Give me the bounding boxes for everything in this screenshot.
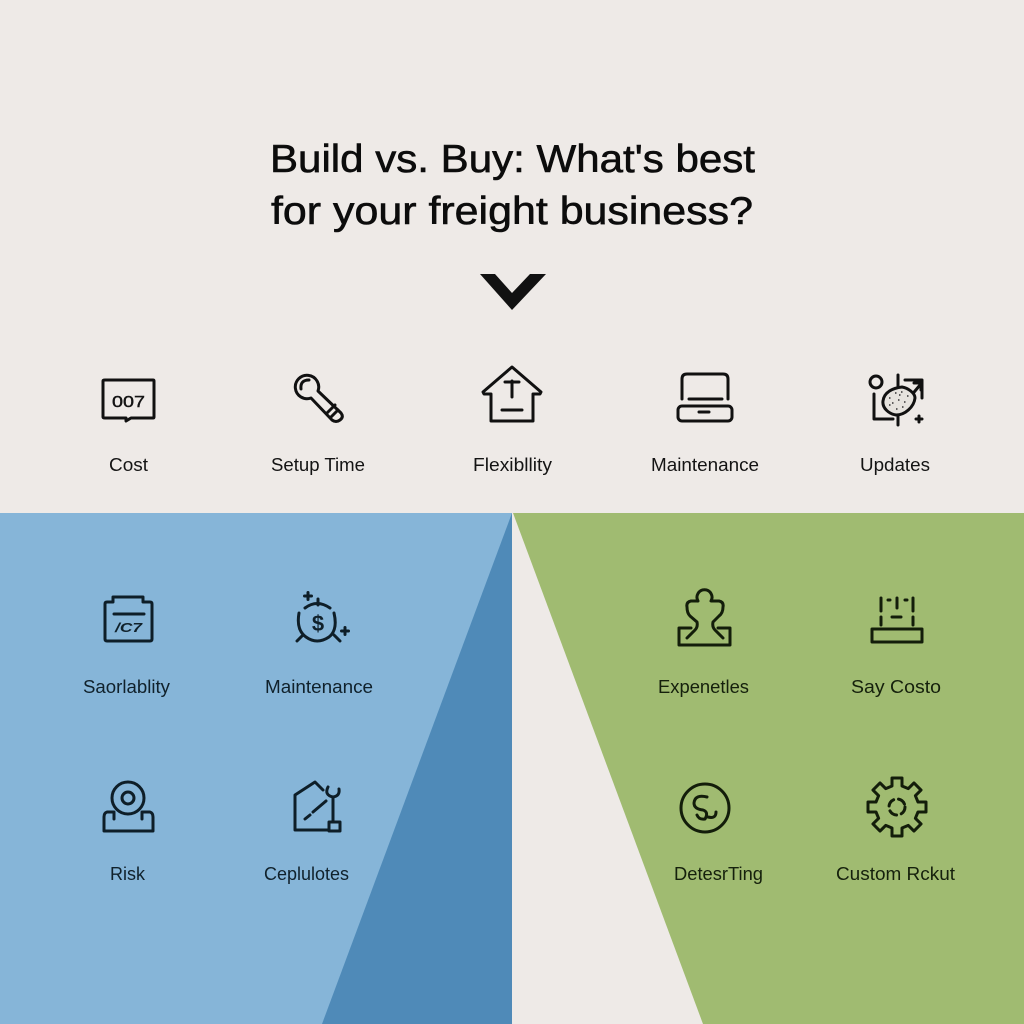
item: Maintenance (651, 374, 759, 475)
icon: wrench (295, 375, 342, 422)
icon: house with wrench (295, 782, 340, 831)
icon: dotted leaf with arrow (870, 375, 922, 425)
item: Ceplulotes (264, 782, 349, 884)
title (270, 138, 755, 233)
icon: laptop (678, 374, 732, 421)
label: Setup Time: Setup Time (271, 455, 365, 475)
item: Expenetles (658, 590, 749, 697)
item: Risk (104, 782, 153, 884)
label: Flexibility: Flexibllity (473, 455, 552, 475)
icon: folder: /C7 (114, 621, 143, 635)
title: for your freight business? (271, 190, 753, 233)
item: Detesrting (674, 784, 763, 884)
icon: pedestal (872, 598, 922, 642)
arrow: chevron down (480, 274, 546, 310)
item: Flexibility (473, 367, 552, 475)
panel: buy (green) (513, 513, 1024, 1024)
item: Cost (103, 380, 154, 475)
item: Saorlablity (83, 597, 170, 697)
item: Setup Time (271, 375, 365, 475)
icon: target person (104, 782, 153, 831)
icon: coin (681, 784, 729, 832)
item: Maintenance (blue) (265, 592, 373, 697)
icon: gear (868, 778, 926, 836)
label: Expenetles: Expenetles (658, 677, 749, 697)
title: Build vs. Buy: What's best (270, 138, 755, 181)
label: Custom Rckut: Custom Rckut (836, 864, 955, 884)
icon: puzzle piece (679, 590, 730, 645)
label: Maintenance: Maintenance (651, 455, 759, 475)
icon: price display: 007 (112, 394, 145, 411)
icon: dollar clock: $ (312, 611, 324, 636)
item: Say Costo (851, 598, 941, 697)
label: Updates: Updates (860, 455, 930, 475)
label: Maintenance: Maintenance (265, 677, 373, 697)
label: DetesrTing: DetesrTing (674, 864, 763, 884)
icon: house with arrow (483, 367, 541, 421)
label: Saorlablity: Saorlablity (83, 677, 170, 697)
panel: build (blue) (0, 513, 512, 1024)
label: Say Costo: Say Costo (851, 677, 941, 697)
label: Risk: Risk (110, 864, 146, 884)
label: Cost: Cost (109, 455, 148, 475)
item: Updates (860, 375, 930, 475)
item: Custom Rckut (836, 778, 955, 884)
label: Ceplulotes: Ceplulotes (264, 864, 349, 884)
